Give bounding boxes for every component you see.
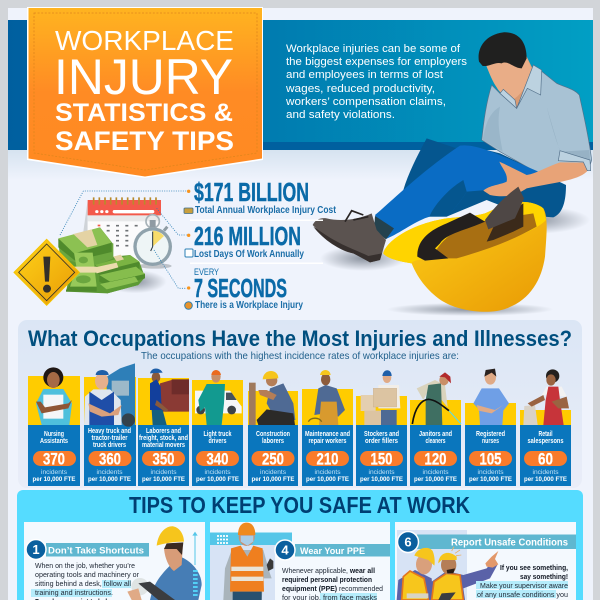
card: registered nurses: per 10,000 FTE: [469, 476, 513, 483]
stat: lost days: 216 MILLION: [194, 221, 301, 251]
card: light truck drivers: 340: [206, 450, 228, 468]
illustration: calendar, stopwatch, money and warning sign: [14, 190, 190, 305]
card: retail salespersons: [520, 369, 571, 486]
worker with tablet: [127, 526, 202, 600]
card: truck drivers: [84, 363, 136, 486]
step 6 badge: 6: [404, 534, 412, 550]
card: retail salespersons: 60: [538, 450, 553, 468]
tip 6 heading: Report Unsafe Conditions: [451, 538, 568, 548]
card: truck drivers: Heavy truck and: [88, 428, 131, 435]
title badge: INJURY: [54, 49, 233, 105]
stat: every 7 seconds: 7 SECONDS: [194, 273, 287, 303]
leader lines: [60, 191, 187, 288]
stat: lost days: [185, 220, 323, 260]
intro text: [285, 43, 468, 121]
back leg: [403, 138, 566, 217]
tip 4 text: equipment (PPE) recommended: [282, 584, 383, 593]
card: maintenance and repair: per 10,000 FTE: [306, 476, 350, 483]
card: registered nurses: [465, 369, 516, 486]
card: laborers and movers: [138, 368, 189, 486]
card: construction laborers: laborers: [262, 438, 284, 445]
tip 4 text: required personal protection: [282, 575, 372, 584]
card: nursing assistants: 370: [43, 450, 65, 468]
tip 1 text: training and instructions.: [35, 588, 113, 597]
tip 1 text: When on the job, whether you’re: [35, 561, 135, 570]
warning sign: [14, 239, 79, 305]
card: nursing assistants: per 10,000 FTE: [32, 476, 76, 483]
hard hat: [383, 187, 547, 312]
card: light truck drivers: incidents: [204, 469, 231, 476]
card: registered nurses: Registered: [476, 431, 505, 438]
tip 1: don't take shortcuts: [24, 522, 205, 600]
step 1 badge: [26, 540, 149, 560]
card: light truck drivers: per 10,000 FTE: [196, 476, 240, 483]
card: laborers and movers: per 10,000 FTE: [142, 476, 186, 483]
tip 6 text: say something!: [520, 572, 568, 581]
title badge: [27, 7, 263, 178]
card: construction laborers: per 10,000 FTE: [252, 476, 295, 483]
card: nursing assistants: Assistants: [40, 438, 68, 445]
card: nursing assistants: incidents: [41, 469, 68, 476]
card: light truck drivers: [192, 370, 243, 486]
card: janitors and cleaners: [410, 372, 461, 486]
money stacks: [58, 227, 145, 293]
tip 4: wear your PPE: [210, 522, 390, 600]
top banner: [8, 20, 593, 150]
card: construction laborers: Construction: [256, 431, 290, 438]
card: stockers and order fillers: incidents: [368, 469, 395, 476]
card: janitors and cleaners: per 10,000 FTE: [414, 476, 458, 483]
lower back stack: [59, 243, 113, 267]
intro text: and safety violations.: [286, 109, 395, 121]
step 4 badge: 4: [281, 542, 289, 558]
card: maintenance and repair: Maintenance and: [305, 431, 350, 438]
card: retail salespersons: salespersons: [528, 438, 564, 445]
card: truck drivers: tractor-trailer: [92, 435, 128, 442]
card: stockers and order fillers: [356, 370, 407, 486]
stopwatch: [133, 215, 172, 269]
stat: lost days: Lost Days Of Work Annually: [194, 249, 304, 260]
card: laborers and movers: incidents: [150, 469, 177, 476]
tip 6 text: [477, 563, 568, 599]
card: laborers and movers: freight, stock, and: [139, 435, 188, 442]
boot: [313, 213, 386, 262]
stat: annual cost: [184, 177, 337, 216]
card: nursing assistants: Nursing: [44, 431, 64, 438]
card: construction laborers: 250: [262, 450, 284, 468]
card: construction laborers: incidents: [260, 469, 287, 476]
title badge: SAFETY TIPS: [55, 126, 234, 156]
illustration: injured worker with hard hat: [313, 32, 592, 316]
highlights: [476, 581, 568, 598]
card: construction laborers: [248, 371, 298, 486]
panel: occupations: [18, 320, 582, 488]
card: retail salespersons: per 10,000 FTE: [524, 476, 568, 483]
right upper stack: [95, 262, 139, 277]
panel: safety tips: [17, 490, 583, 600]
tip 1 text: sitting behind a desk, follow all: [35, 579, 131, 588]
card: maintenance and repair: 210: [316, 450, 338, 468]
intro text: and employees in terms of lost: [286, 69, 443, 81]
tip 4 text: [282, 566, 383, 600]
tip 1 text: operating tools and machinery or: [35, 570, 139, 579]
card: nursing assistants: [28, 367, 80, 486]
step 6 badge bar: [417, 534, 576, 549]
tip 6: report unsafe conditions: [395, 522, 576, 600]
card: maintenance and repair: repair workers: [308, 438, 347, 445]
right lower stacks: [99, 273, 145, 287]
collar: [500, 89, 517, 108]
stat: every 7 seconds: There is a Workplace Injury: [195, 300, 303, 311]
highlights: [31, 580, 131, 597]
step 1 badge: Don’t Take Shortcuts: [48, 546, 144, 556]
card: light truck drivers: drivers: [208, 438, 227, 445]
card: laborers and movers: 350: [152, 450, 174, 468]
two workers pointing: [397, 547, 498, 600]
title badge: STATISTICS &: [55, 99, 233, 127]
stat: every 7 seconds: [185, 262, 323, 311]
card: laborers and movers: Laborers and: [146, 428, 181, 435]
card: laborers and movers: material movers: [142, 442, 185, 449]
tip 6 text: If you see something,: [500, 563, 568, 572]
calendar: [83, 197, 161, 268]
step 6 badge: [398, 532, 418, 552]
intro text: wages, reduced productivity,: [285, 83, 435, 95]
card: registered nurses: 105: [480, 450, 502, 468]
tip 6 text: of any unsafe conditions you: [477, 590, 568, 599]
card: janitors and cleaners: incidents: [422, 469, 449, 476]
card: registered nurses: nurses: [482, 438, 499, 445]
front leg: [375, 145, 538, 239]
tip 6 text: Make your supervisor aware: [480, 581, 568, 590]
step 1 badge: 1: [32, 542, 40, 557]
stat: annual cost: $171 BILLION: [194, 177, 309, 207]
step 4 badge: Wear Your PPE: [300, 546, 365, 557]
sock: [374, 216, 394, 239]
tip 1 text: [35, 561, 139, 600]
top stack: [58, 238, 112, 261]
money base mass: [58, 227, 145, 293]
card: truck drivers: truck drivers: [93, 442, 126, 449]
stat: annual cost: Total Annual Workplace Injury Cost: [195, 205, 337, 216]
card: stockers and order fillers: 150: [370, 450, 392, 468]
intro text: the biggest expenses for employers: [286, 56, 468, 68]
card: janitors and cleaners: cleaners: [426, 438, 446, 445]
floor gradient: [8, 150, 593, 180]
card: maintenance and repair: incidents: [314, 469, 341, 476]
tip 4 text: Whenever applicable, wear all: [282, 566, 375, 575]
card: truck drivers: 360: [99, 450, 121, 468]
card: retail salespersons: incidents: [532, 469, 559, 476]
worker in PPE: [223, 523, 273, 600]
card: light truck drivers: Light truck: [204, 431, 232, 438]
card: registered nurses: incidents: [478, 469, 504, 476]
shirt: [482, 65, 592, 173]
card: janitors and cleaners: Janitors and: [419, 431, 452, 438]
stat: every 7 seconds: EVERY: [194, 267, 219, 277]
intro text: Workplace injuries can be some of: [286, 43, 461, 55]
card: retail salespersons: Retail: [538, 431, 553, 438]
tips heading: TIPS TO KEEP YOU SAFE AT WORK: [129, 492, 470, 518]
card: truck drivers: per 10,000 FTE: [88, 476, 132, 483]
hair: [479, 32, 527, 68]
title badge: WORKPLACE: [55, 25, 234, 56]
neck and face: [500, 57, 533, 108]
card: stockers and order fillers: order fillers: [365, 438, 398, 445]
front bundle: [66, 285, 97, 292]
intro text: workers’ compensation claims,: [285, 96, 446, 108]
card: janitors and cleaners: 120: [424, 450, 446, 468]
step 4 badge: [275, 540, 390, 560]
card: truck drivers: incidents: [96, 469, 123, 476]
card: stockers and order fillers: Stockers and: [364, 431, 399, 438]
card: maintenance and repair: [302, 370, 353, 486]
occupations subheading: The occupations with the highest incidence rates of workplace injuries are:: [141, 350, 459, 362]
hand and forearm: [483, 162, 588, 196]
card: stockers and order fillers: per 10,000 FTE: [360, 476, 404, 483]
